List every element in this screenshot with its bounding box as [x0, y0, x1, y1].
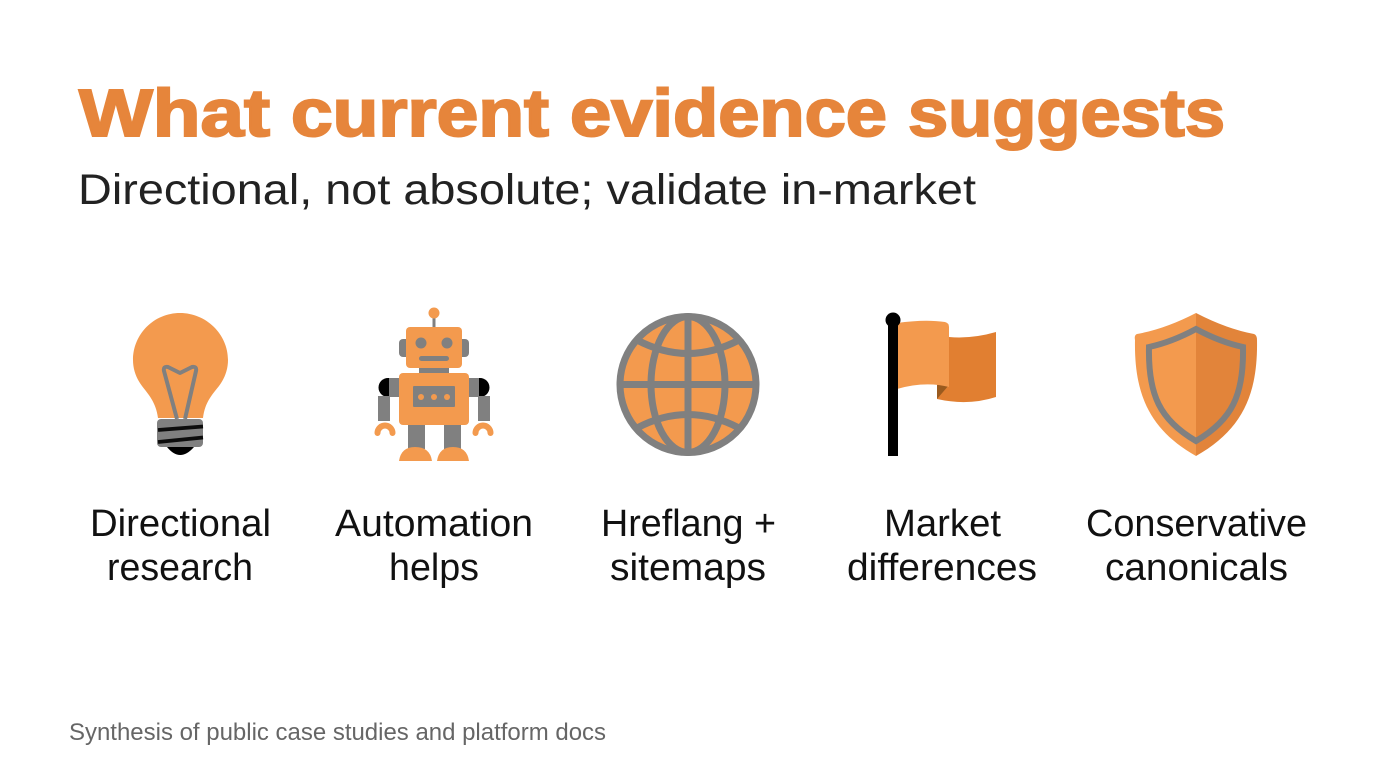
- subtitle: Directional, not absolute; validate in-market: [78, 166, 976, 214]
- label: conservative canonicals: Conservative: [1086, 503, 1307, 545]
- label: market differences: Market: [884, 503, 1001, 545]
- icon: flag: [886, 312, 996, 456]
- label: directional research: [90, 503, 271, 589]
- icon: light bulb: [133, 313, 228, 455]
- icon: globe: [620, 316, 756, 453]
- label: directional research: Directional: [90, 503, 271, 545]
- label: automation helps: [335, 503, 533, 589]
- title: What: [79, 76, 270, 151]
- label: hreflang + sitemaps: [601, 503, 776, 589]
- label: market differences: [847, 503, 1037, 589]
- title: evidence: [570, 76, 887, 151]
- label: directional research: research: [107, 547, 253, 589]
- icon: shield: [1135, 313, 1257, 456]
- footer source note: Synthesis of public case studies and platform docs: [69, 719, 606, 746]
- label: conservative canonicals: [1086, 503, 1307, 589]
- label: market differences: differences: [847, 547, 1037, 589]
- label: conservative canonicals: canonicals: [1105, 547, 1288, 589]
- label: automation helps: helps: [389, 547, 479, 589]
- label: automation helps: Automation: [335, 503, 533, 545]
- title: [79, 76, 1225, 151]
- label: hreflang + sitemaps: Hreflang +: [601, 503, 776, 545]
- title: suggests: [908, 76, 1225, 151]
- icon: robot: [378, 308, 490, 461]
- title: current: [291, 76, 549, 151]
- label: hreflang + sitemaps: sitemaps: [610, 547, 766, 589]
